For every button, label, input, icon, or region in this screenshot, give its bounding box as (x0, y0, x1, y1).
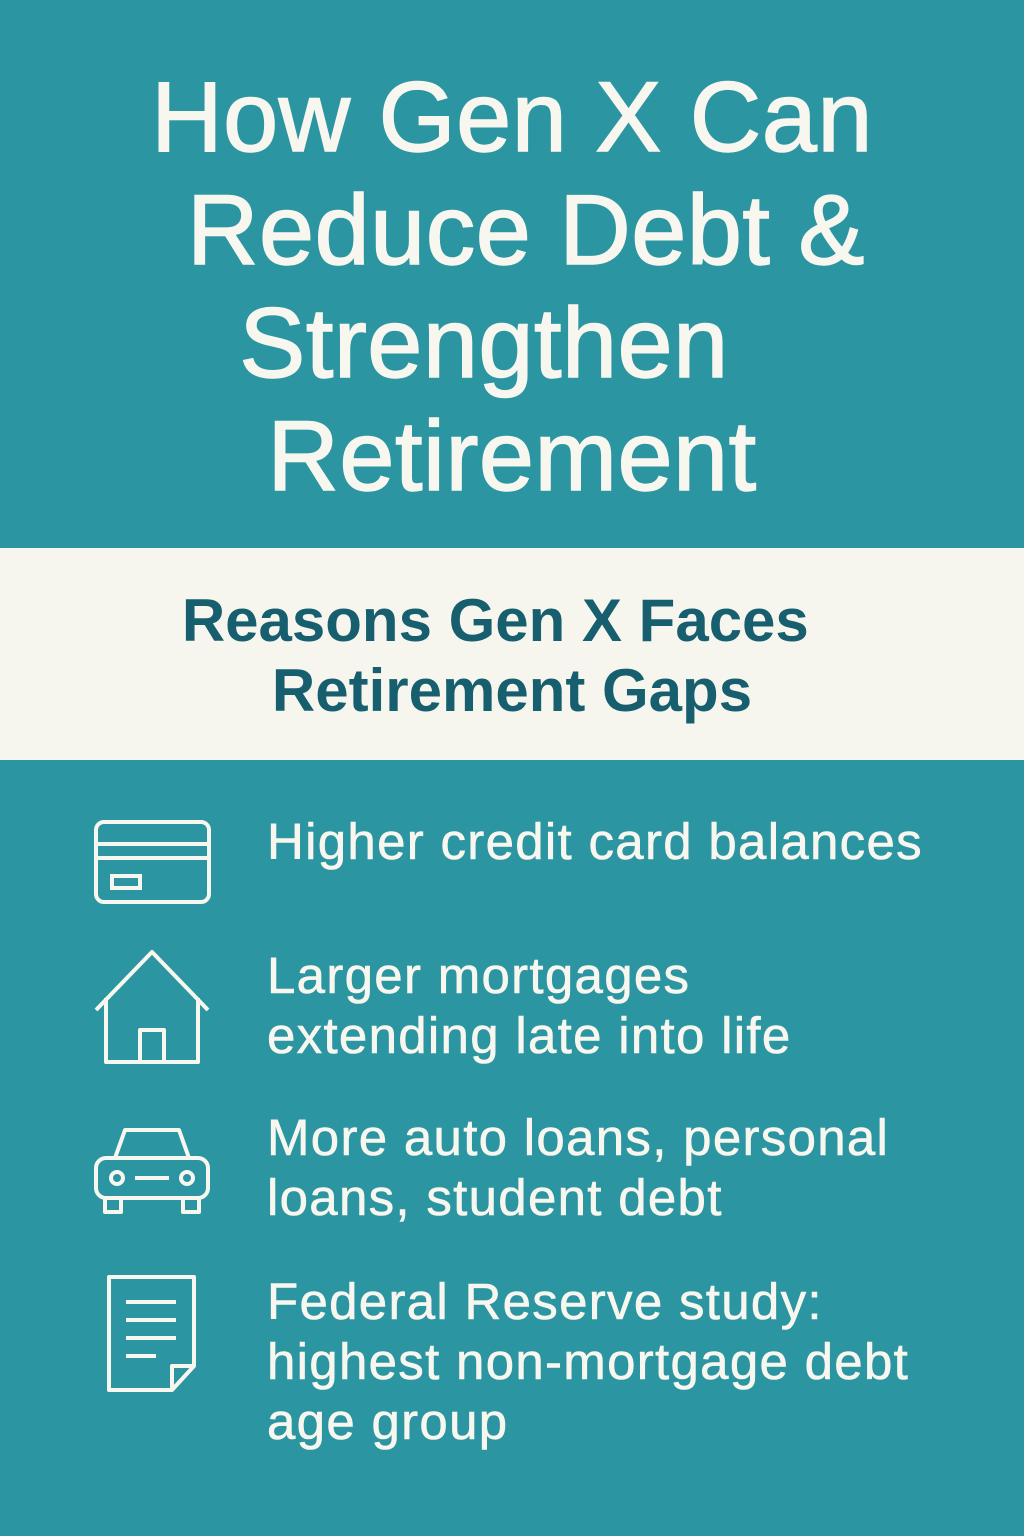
title (151, 61, 873, 511)
icon: house (94, 950, 210, 1064)
icon: credit card (94, 820, 211, 904)
item: loans: loans, student debt (267, 1169, 723, 1226)
item: federal reserve: age group (267, 1393, 508, 1450)
item: loans (267, 1109, 889, 1226)
title: Strengthen (239, 287, 729, 398)
item: credit card: Higher credit card balances (267, 813, 923, 870)
icon: car (94, 1128, 210, 1214)
icon: document (107, 1275, 196, 1392)
item: federal reserve: Federal Reserve study: (267, 1273, 823, 1330)
subtitle: Retirement Gaps (272, 657, 752, 724)
title: Retirement (267, 400, 757, 511)
item: mortgages: Larger mortgages (267, 947, 690, 1004)
item: federal reserve: highest non-mortgage debt (267, 1333, 909, 1390)
title: How Gen X Can (151, 61, 873, 172)
item: mortgages (267, 947, 792, 1064)
item: mortgages: extending late into life (267, 1007, 792, 1064)
subtitle (182, 587, 809, 724)
item: federal reserve (267, 1273, 909, 1450)
item: loans: More auto loans, personal (267, 1109, 889, 1166)
band: subtitle (0, 548, 1024, 760)
title: Reduce Debt & (187, 174, 865, 285)
subtitle: Reasons Gen X Faces (182, 587, 809, 654)
